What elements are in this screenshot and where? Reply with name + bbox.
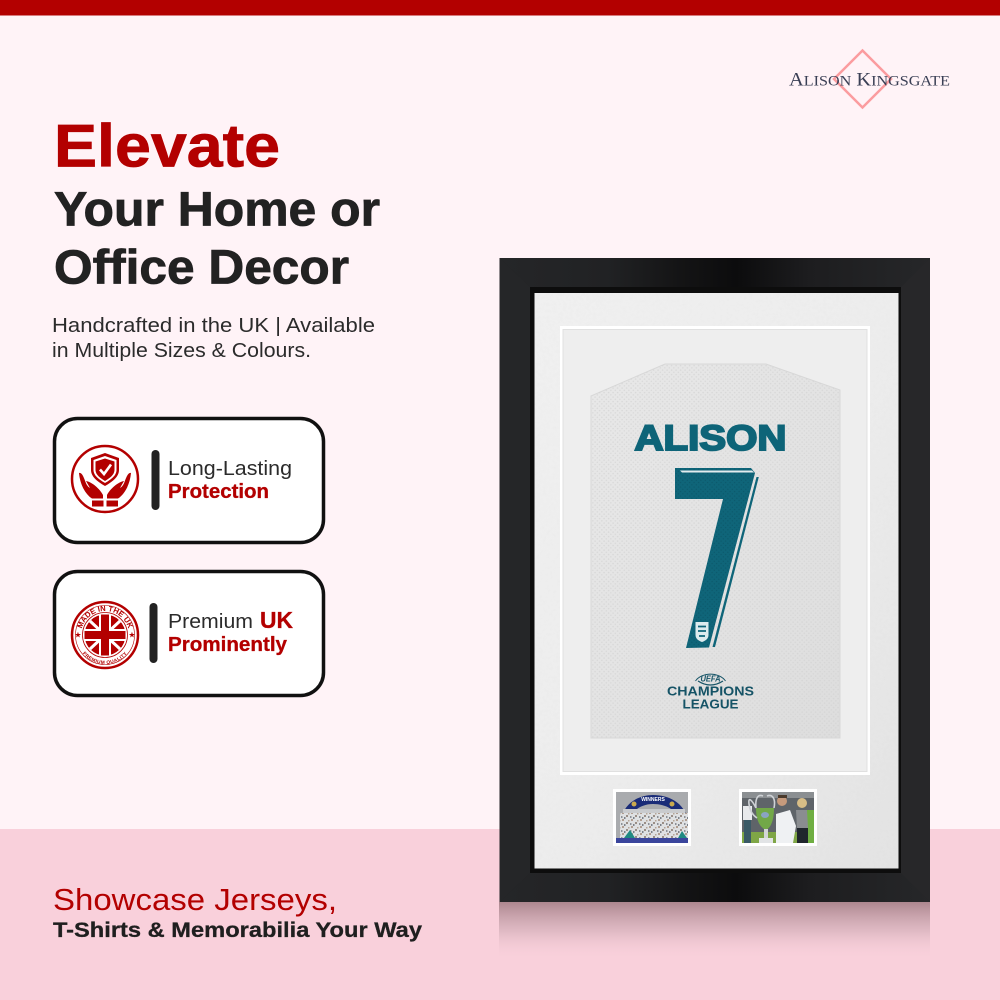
card: premium UK: UK <box>260 607 293 633</box>
logo: Alison Kingsgate: ALISON KINGSGATE <box>789 70 950 90</box>
card text: Long-Lasting <box>168 457 292 480</box>
photo: team celebration <box>613 789 691 846</box>
bottom caption <box>53 882 422 942</box>
icon: made in the UK badge: MADE IN THE UK <box>77 606 133 628</box>
frame reflection <box>499 902 930 960</box>
player name: ALISON <box>634 418 786 458</box>
title: Your Home or <box>54 184 380 236</box>
icon: made in the UK badge: ★ <box>128 630 136 640</box>
icon: shield in caring hands <box>72 446 138 512</box>
divider bar <box>152 450 160 510</box>
UEFA Champions League logo: CHAMPIONS <box>667 684 754 698</box>
number 7 <box>675 468 759 648</box>
photo: team celebration: WINNERS <box>641 797 665 803</box>
white mount board <box>534 293 898 868</box>
UEFA Champions League logo <box>667 674 754 712</box>
subtitle text <box>52 314 375 362</box>
title: Elevate <box>54 112 280 180</box>
subtitle text: Handcrafted in the UK | Available <box>52 314 375 337</box>
card: premium UK <box>52 570 326 698</box>
jersey <box>591 364 840 738</box>
logo: Alison Kingsgate <box>789 50 950 108</box>
bottom caption: T-Shirts & Memorabilia Your Way <box>53 918 422 942</box>
title <box>54 112 380 294</box>
card: long-lasting protection <box>54 418 324 542</box>
card: long-lasting protection: Protection <box>168 480 269 503</box>
photo: trophy <box>739 789 817 846</box>
top bar <box>0 0 1000 16</box>
card: premium UK: Prominently <box>168 633 288 656</box>
bottom caption: Showcase Jerseys, <box>53 882 337 917</box>
UEFA Champions League logo: UEFA <box>700 674 721 684</box>
UEFA Champions League logo: LEAGUE <box>682 696 739 712</box>
framed jersey <box>500 258 930 902</box>
divider bar <box>150 603 158 663</box>
subtitle text: in Multiple Sizes & Colours. <box>52 339 311 362</box>
bottom pink band <box>0 829 1000 1000</box>
crest on number <box>696 622 708 642</box>
black frame <box>500 258 930 902</box>
title: Office Decor <box>54 242 349 294</box>
icon: made in the UK badge: PREMIUM QUALITY <box>82 651 126 665</box>
icon: made in the UK badge: ★ <box>74 630 82 640</box>
icon: made in the UK badge <box>70 600 140 670</box>
card text: Premium <box>168 610 253 633</box>
